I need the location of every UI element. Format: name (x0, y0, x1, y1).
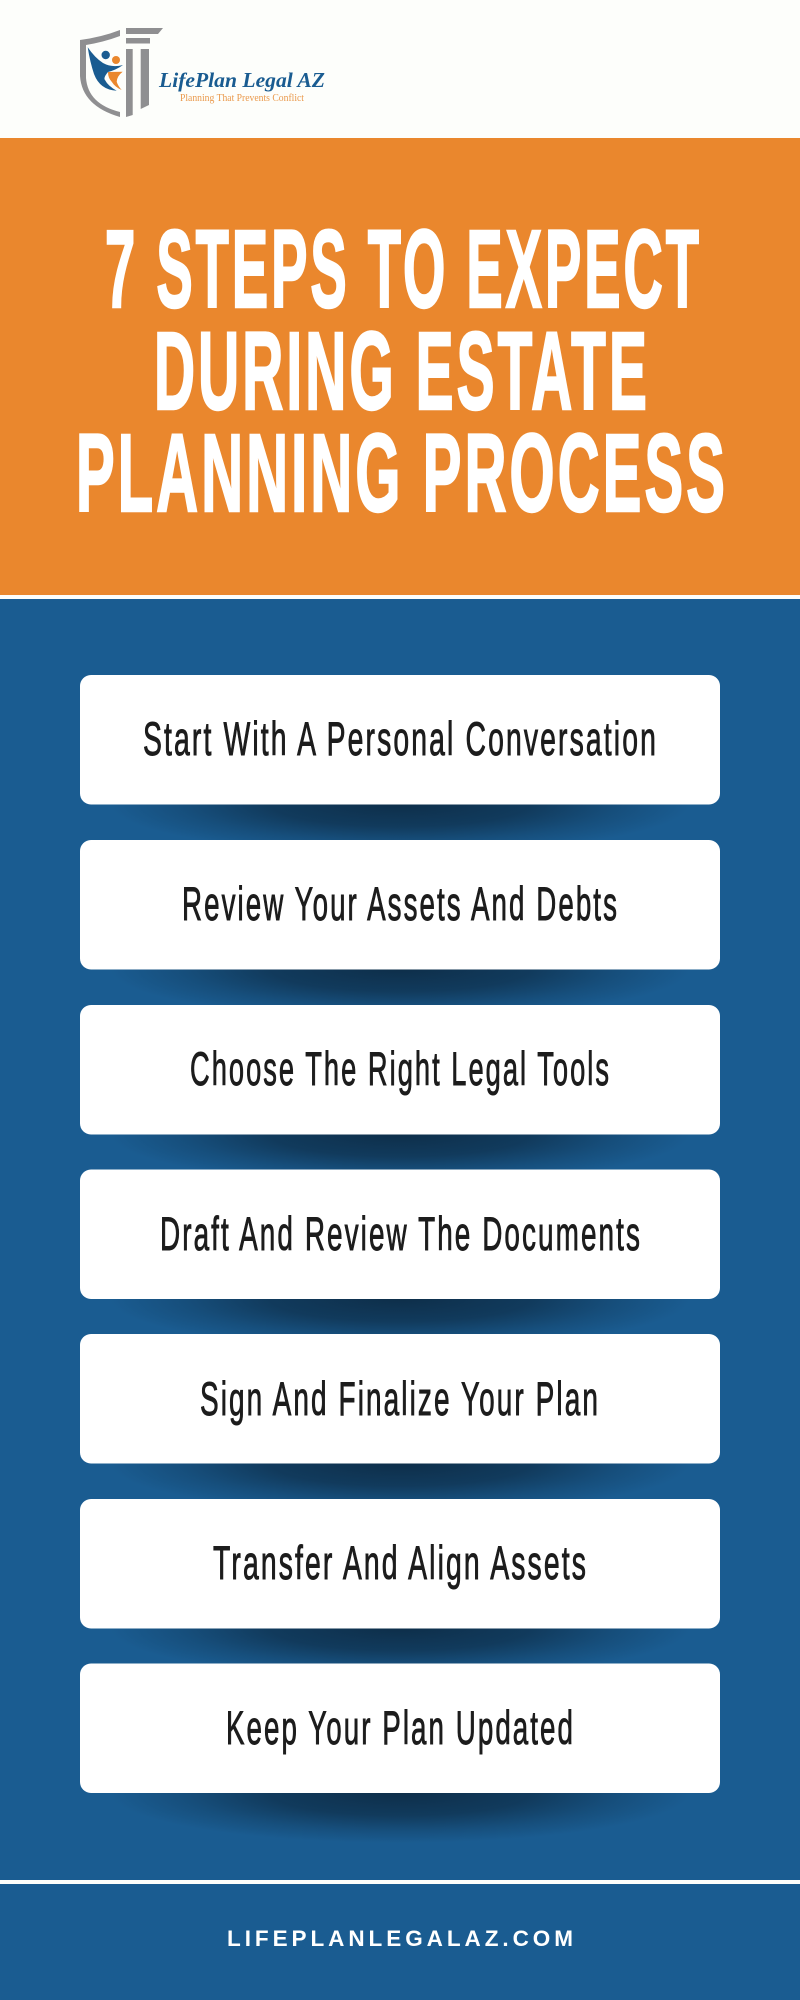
footer website: LIFEPLANLEGALAZ.COM (227, 1926, 573, 1951)
step 6 card (80, 1499, 720, 1678)
step 1 card (80, 675, 720, 854)
panel: title banner (0, 138, 800, 595)
title (76, 208, 728, 535)
icon: logo shield and column (80, 28, 163, 117)
step 5 card (80, 1334, 720, 1514)
logo tagline: Planning That Prevents Conflict (180, 92, 304, 104)
step 7 card (80, 1664, 720, 1843)
panel: logo header (0, 0, 800, 138)
logo name: LifePlan Legal AZ (158, 68, 325, 92)
step 2 card (80, 840, 720, 1019)
step 3 card (80, 1005, 720, 1184)
step 4 card (80, 1170, 720, 1349)
panel: footer (0, 1884, 800, 2000)
panel: steps background (0, 599, 800, 1880)
